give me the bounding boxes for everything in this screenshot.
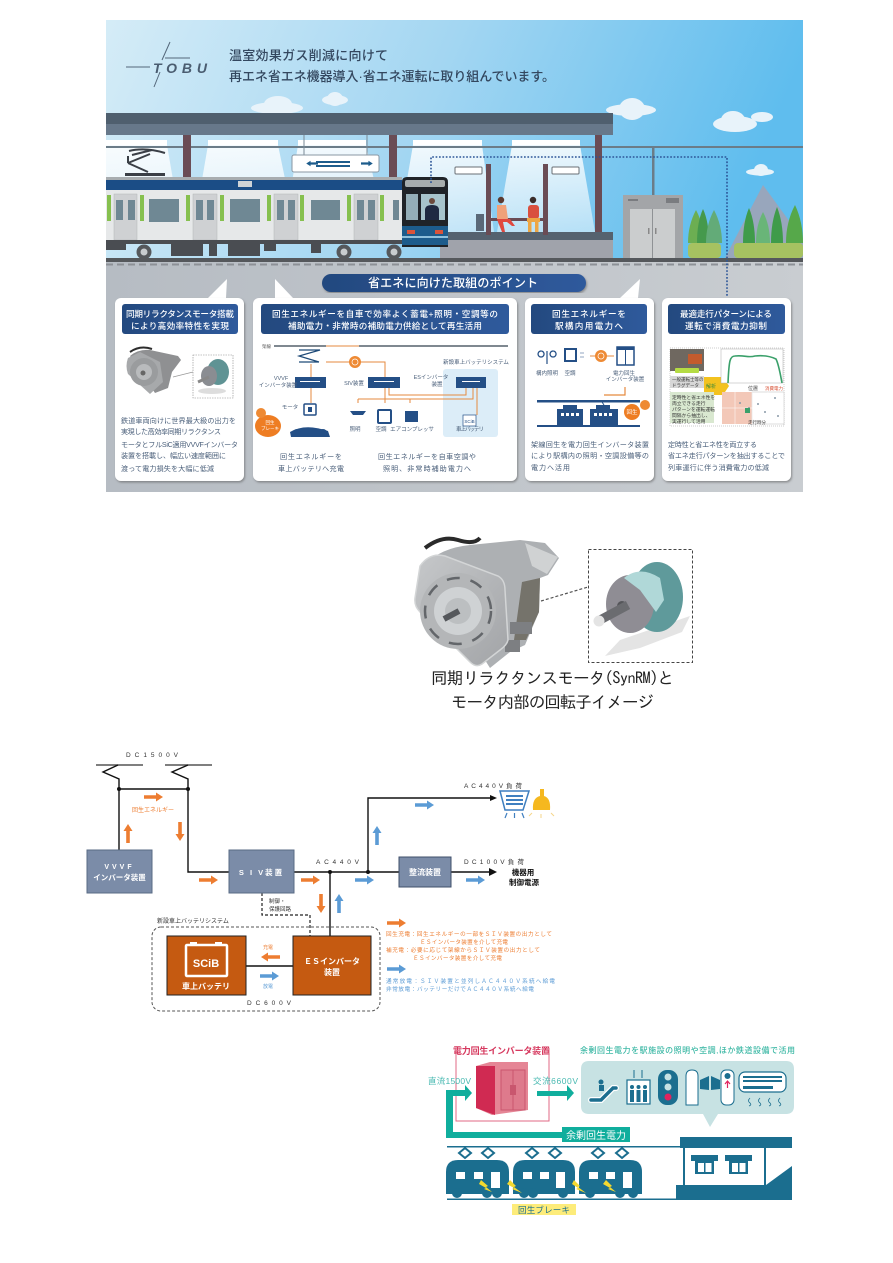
diagram labels: 制御電源 — [509, 877, 539, 887]
card heading: 最適走行パターンによる — [680, 308, 772, 319]
orange flow arrows — [124, 792, 406, 962]
mini diagram: power flow: 装置 — [431, 380, 443, 388]
card captions: 照明、非常時補助電力へ — [383, 464, 471, 473]
mini chart: run pattern: 位置 — [748, 385, 758, 392]
mini diagram: power flow: モータ — [282, 403, 298, 411]
mini chart: run pattern — [670, 348, 784, 426]
blue flow arrows — [260, 800, 485, 980]
device: SIV: S I V装置 — [239, 867, 284, 877]
station building — [676, 1137, 792, 1200]
shelter and passengers — [455, 164, 579, 235]
mini chart: run pattern: 両立できる走行 — [672, 400, 706, 407]
train doors — [114, 194, 378, 240]
mini diagram: power flow: 架線 — [262, 343, 271, 350]
mini chart: run pattern: 実運行して活用 — [672, 418, 706, 425]
diagram labels: 回生エネルギー — [132, 806, 174, 814]
mini diagram: power flow: VVVF — [274, 376, 289, 382]
icon: elevator — [627, 1080, 650, 1104]
mini diagram: station use — [536, 347, 650, 427]
panel: card 2 regenerative energy — [253, 298, 517, 481]
pantograph — [125, 149, 165, 176]
inverter cabinet — [476, 1062, 528, 1115]
diagram labels: 新設車上バッテリシステム — [157, 917, 229, 925]
diagram labels: DC600V — [247, 1000, 292, 1007]
icon: trash bin — [476, 214, 484, 231]
icon: light bulb load — [529, 789, 554, 818]
heading: 電力回生インバータ装置 — [453, 1045, 550, 1056]
diagram labels: DC100V負荷 — [464, 857, 524, 866]
card captions: 車上バッテリへ充電 — [278, 464, 344, 473]
diagram labels: AC440V — [316, 859, 360, 866]
panel: card 4 driving pattern — [662, 298, 791, 481]
train green stripes — [107, 195, 384, 221]
device: battery: SCiB — [193, 958, 219, 970]
icon: seated woman — [497, 197, 515, 232]
card body text: 鉄道車両向けに世界最大級の出力を — [121, 416, 236, 425]
card body text: 省エネ走行パターンを抽出することで — [668, 451, 785, 460]
card body text — [531, 440, 649, 472]
icon: TOBU logo — [126, 42, 208, 87]
callout: regenerative brake: ブレーキ — [261, 425, 279, 431]
wiring — [96, 765, 490, 966]
sign board — [292, 135, 379, 172]
card body text: 実現した高効率同期リラクタンス — [121, 427, 221, 436]
mini diagram: power flow: エアコンプレッサ — [390, 426, 434, 433]
title: 温室効果ガス削減に向けて — [229, 48, 388, 63]
card body text — [668, 440, 785, 472]
card heading: 補助電力・非常時の補助電力供給として再生活用 — [288, 320, 482, 331]
station roof — [106, 113, 613, 135]
card heading: 回生エネルギーを自車で効率よく蓄電+照明・空調等の — [272, 308, 498, 319]
device: battery: 車上バッテリ — [182, 981, 230, 991]
title — [229, 48, 555, 84]
panel: card 1 motor — [115, 298, 244, 481]
panel: power regenerative inverter — [428, 1045, 795, 1215]
voltage labels: 直流1500V — [428, 1076, 471, 1086]
card body text: モータとフルSiC適用VVVFインバータ — [121, 440, 238, 449]
card heading: 回生エネルギーを — [552, 308, 626, 319]
mini diagram: power flow: インバータ装置 — [259, 381, 298, 389]
card heading: 駅構内用電力へ — [555, 320, 623, 331]
device: rectifier — [399, 857, 451, 887]
device: ES inverter — [293, 936, 371, 995]
brake label: 回生ブレーキ — [518, 1205, 570, 1215]
diagram labels: 放電 — [263, 983, 273, 990]
photo caption: モータ内部の回転子イメージ — [451, 693, 654, 710]
icon: signal — [658, 1070, 678, 1105]
system dashed box — [152, 927, 380, 1011]
card heading: 同期リラクタンスモータ搭載 — [126, 308, 234, 319]
device: ES inverter: 装置 — [324, 967, 340, 977]
heading: 余剰回生電力を駅施設の照明や空調,ほか鉄道設備で活用 — [580, 1045, 795, 1055]
card captions: 回生エネルギーを自車空調や — [378, 452, 476, 461]
card heading: 運転で消費電力抑制 — [685, 320, 767, 331]
icon: clouds — [251, 92, 774, 176]
mini diagram: power flow: 空調 — [375, 426, 387, 433]
mini chart: run pattern: パターンを運転運転 — [672, 406, 715, 413]
legend text: 非常放電：バッテリーだけでＡＣ４４０Ｖ系統へ給電 — [386, 985, 534, 993]
legend text: 補充電：必要に応じて架線からＳＩＶ装置の出力として — [386, 946, 540, 954]
inverter cabinet — [623, 147, 683, 258]
card heading — [531, 304, 647, 334]
device boxes — [295, 377, 486, 388]
card body text: により駅構内の照明・空調設備等の — [531, 451, 649, 460]
device: SIV — [229, 850, 294, 893]
mini diagram: station use: 電力回生 — [613, 369, 635, 377]
card body text: 定時性と省エネ性を両立する — [668, 440, 757, 449]
trees and bushes — [688, 205, 803, 258]
card body text: 架線回生を電力回生インバータ装置 — [531, 440, 649, 449]
icon: small motor photo — [126, 348, 233, 398]
icon: seated man — [527, 197, 540, 232]
diagram labels — [126, 752, 539, 1007]
mini diagram: power flow: 新設車上バッテリシステム — [443, 358, 509, 366]
callout: regenerative brake: 回生 — [266, 419, 275, 426]
device: rectifier: 整流装置 — [409, 867, 441, 877]
icon: bogie — [290, 427, 330, 437]
panel: card 3 station power — [525, 298, 654, 481]
overhead line and rail — [447, 1146, 680, 1200]
title: 再エネ省エネ機器導入·省エネ運転に取り組んでいます。 — [229, 69, 555, 84]
surplus power label: 余剰回生電力 — [566, 1129, 626, 1142]
icon: ticket gate — [686, 1070, 698, 1105]
overhead wire — [106, 146, 803, 148]
panel: circuit diagram — [87, 752, 555, 1011]
card heading — [261, 304, 509, 334]
train — [106, 177, 448, 260]
surplus power label — [562, 1127, 630, 1142]
dotted connection line — [431, 157, 727, 297]
platform columns — [183, 135, 602, 233]
mini diagram: station use: インバータ装置 — [606, 375, 645, 383]
icon: rotor image — [588, 550, 692, 662]
connector line — [541, 587, 588, 601]
mini diagram: station use: 回生 — [626, 408, 638, 416]
mini chart: run pattern: ドラグデータ — [672, 382, 699, 389]
junction dots — [117, 787, 497, 876]
card heading — [668, 304, 785, 334]
train underframe — [106, 240, 402, 260]
icon: trains with brake sparks — [446, 1148, 642, 1198]
diagram labels: AC440V負荷 — [464, 781, 522, 790]
mini diagram: station use: 空調 — [564, 370, 576, 377]
legend text: 通常放電：ＳＩＶ装置と並列しＡＣ４４０Ｖ系統へ給電 — [386, 977, 555, 985]
load icons — [350, 410, 418, 423]
device: ES inverter: ＥＳインバータ — [304, 956, 360, 966]
rail track — [106, 258, 803, 264]
callout tails — [208, 279, 640, 298]
diagram labels: DC1500V — [126, 752, 179, 759]
photo caption: 同期リラクタンスモータ(SynRM)と — [431, 669, 674, 686]
pink frame — [456, 1048, 549, 1121]
mini diagram: power flow: SIV装置 — [344, 379, 364, 387]
icon: air conditioner load — [500, 791, 529, 818]
device: battery — [167, 936, 246, 995]
light cones under roof — [106, 140, 595, 232]
diagram labels: 保護回路 — [269, 905, 292, 913]
mini chart: run pattern: 消費電力 — [765, 385, 783, 392]
icon: air conditioner — [739, 1072, 786, 1092]
mini diagram: power flow: 車上バッテリ — [456, 425, 484, 433]
speech panel: station equipment — [581, 1061, 794, 1127]
mini diagram: power flow — [255, 343, 509, 437]
card body text: 装置を搭載し、幅広い速度範囲に — [121, 451, 226, 460]
mini diagram: power flow: 照明 — [349, 426, 361, 433]
heading pill: 省エネに向けた取組のポイント — [368, 275, 538, 290]
mini chart: run pattern: 間隔から抽出し、 — [672, 412, 710, 419]
panel: motor photo — [415, 538, 692, 710]
diagram labels: 充電 — [263, 945, 273, 951]
icon: escalator — [591, 1088, 616, 1100]
voltage labels: 交流6600V — [533, 1076, 578, 1086]
mini diagram: station use: 構内照明 — [536, 369, 558, 377]
mountain — [725, 185, 803, 258]
mini chart: run pattern: 一般運転士等の — [672, 376, 704, 383]
heading — [453, 1045, 795, 1056]
teal arrows — [446, 1085, 574, 1138]
card captions — [278, 452, 476, 473]
photo caption — [431, 669, 674, 710]
card body text: 電力へ活用 — [531, 463, 570, 472]
card heading — [122, 304, 238, 334]
card body text — [121, 416, 238, 473]
mini chart: run pattern: 解析 — [706, 383, 716, 390]
panel: top station illustration — [87, 20, 803, 1215]
mini chart: run pattern: 走行時分 — [748, 419, 766, 426]
heading pill — [322, 274, 586, 292]
platform — [440, 232, 613, 259]
mini diagram: power flow: ESインバータ — [414, 373, 448, 381]
callout: regeneration — [624, 404, 640, 420]
card body text: 渡って電力損失を大幅に低減 — [121, 464, 214, 473]
device: VVVF — [87, 850, 152, 893]
mini chart: run pattern: 定時性と省エネ性を — [672, 394, 715, 401]
train cab — [402, 177, 448, 247]
legend text: ＥＳインバータ装置を介して充電 — [413, 954, 502, 962]
control dashed line — [262, 893, 310, 936]
icon: big motor — [415, 538, 559, 668]
icon: train cars — [537, 402, 640, 427]
train windows — [116, 199, 399, 222]
card captions: 回生エネルギーを — [280, 452, 342, 461]
legend text: ＥＳインバータ装置を介して充電 — [420, 938, 508, 946]
device: VVVF: VVVF — [104, 864, 135, 871]
voltage labels — [428, 1076, 578, 1086]
device: VVVF: インバータ装置 — [93, 872, 146, 882]
legend text — [386, 930, 555, 993]
diagram labels: 制御・ — [269, 897, 286, 905]
legend text: 回生充電：回生エネルギーの一部をＳＩＶ装置の出力として — [386, 930, 552, 938]
diagram labels: 機器用 — [512, 867, 534, 877]
mini diagram: power flow: SCiB — [464, 419, 475, 424]
card heading: により高効率特性を実現 — [131, 320, 229, 331]
icon: TOBU logo: TOBU — [153, 60, 208, 76]
callout: regenerative brake — [255, 408, 281, 437]
card body text: 列車運行に伴う消費電力の低減 — [668, 463, 769, 472]
